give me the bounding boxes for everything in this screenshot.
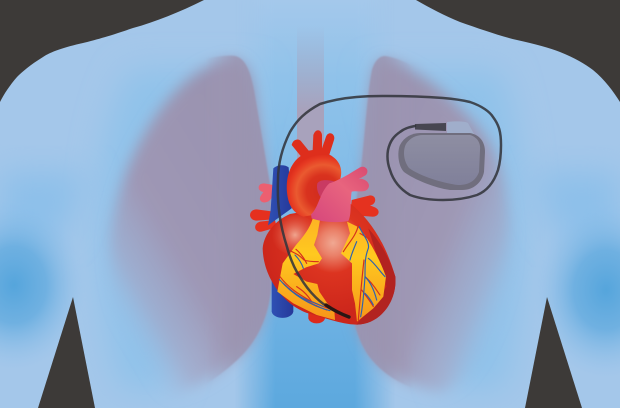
pale highlight [272, 215, 318, 255]
armpit: left [38, 297, 95, 408]
pacemaker: can rim [398, 133, 485, 190]
inferior vena cava [272, 270, 293, 318]
aorta [287, 130, 341, 217]
shoulder: left [0, 0, 204, 102]
coronary vessels: red [280, 225, 380, 320]
pacemaker: can face [404, 135, 480, 185]
right vessels [350, 195, 379, 229]
left vessels [250, 183, 277, 232]
lower red vessel [308, 307, 325, 323]
superior vena cava [268, 165, 292, 225]
heart body [263, 203, 396, 325]
pulmonary trunk stub [317, 180, 335, 200]
pulmonary artery [311, 167, 369, 222]
orange patch: left [277, 219, 335, 320]
trachea [297, 25, 324, 160]
heart [250, 130, 396, 325]
orange patch: right [341, 222, 386, 322]
armpit: right [525, 297, 582, 408]
pacing lead tip [326, 305, 349, 317]
right lung [350, 56, 510, 395]
pacemaker: header [447, 121, 474, 134]
coronary vessels: blue [279, 227, 385, 317]
pacing lead [278, 96, 501, 308]
right ventricle shade [357, 228, 396, 325]
pacemaker [398, 121, 485, 190]
left lung [110, 56, 271, 402]
shoulder: right [416, 0, 620, 102]
pacemaker: connector [415, 123, 446, 131]
